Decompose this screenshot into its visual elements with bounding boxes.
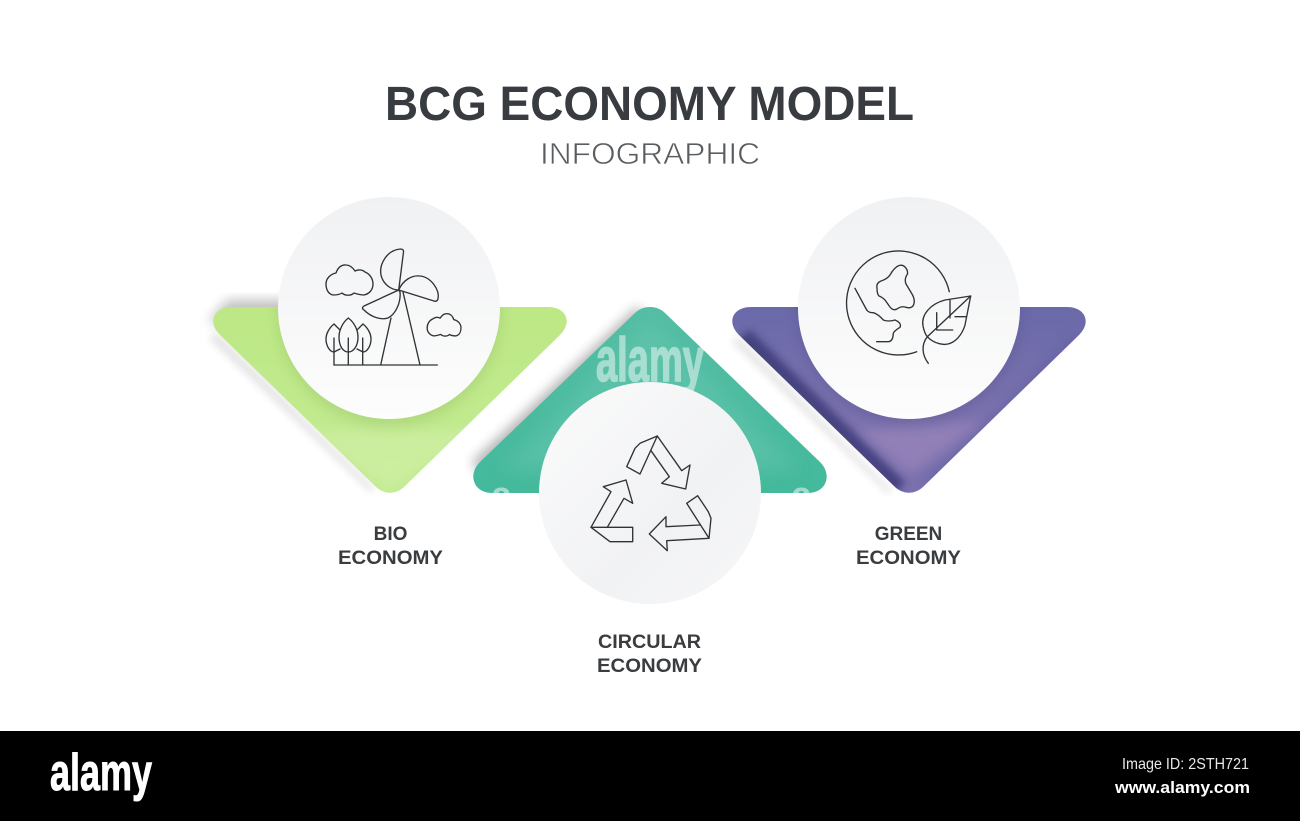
footer image id: Image ID: 2STH721 — [1122, 756, 1249, 773]
watermark: alamy — [596, 326, 704, 395]
label: bio economy — [338, 524, 443, 569]
label: green economy: GREEN — [875, 524, 942, 545]
subtitle: INFOGRAPHIC — [540, 136, 760, 171]
label: circular economy: ECONOMY — [597, 656, 702, 677]
panel: circular economy triangle — [472, 306, 827, 517]
panel: green economy triangle — [732, 307, 1086, 493]
label: bio economy: ECONOMY — [338, 548, 443, 569]
footer url: www.alamy.com — [1114, 778, 1250, 797]
circle: circular economy — [539, 382, 761, 604]
footer logo: alamy — [50, 744, 152, 802]
circle: bio economy — [278, 197, 500, 419]
panel: circular economy triangle: a — [791, 475, 813, 517]
panel: bio economy triangle — [207, 294, 567, 493]
panel: circular economy triangle: a — [491, 475, 513, 517]
label: bio economy: BIO — [374, 524, 407, 545]
icon: globe and leaf — [847, 251, 971, 363]
label: green economy — [856, 524, 961, 569]
icon: recycle arrows — [591, 436, 711, 551]
label: green economy: ECONOMY — [856, 548, 961, 569]
circle: green economy — [798, 197, 1020, 419]
footer bar — [0, 731, 1300, 821]
label: circular economy — [597, 632, 702, 677]
label: circular economy: CIRCULAR — [598, 632, 701, 653]
title: BCG ECONOMY MODEL — [385, 78, 914, 131]
icon: windmill and trees — [326, 249, 461, 365]
